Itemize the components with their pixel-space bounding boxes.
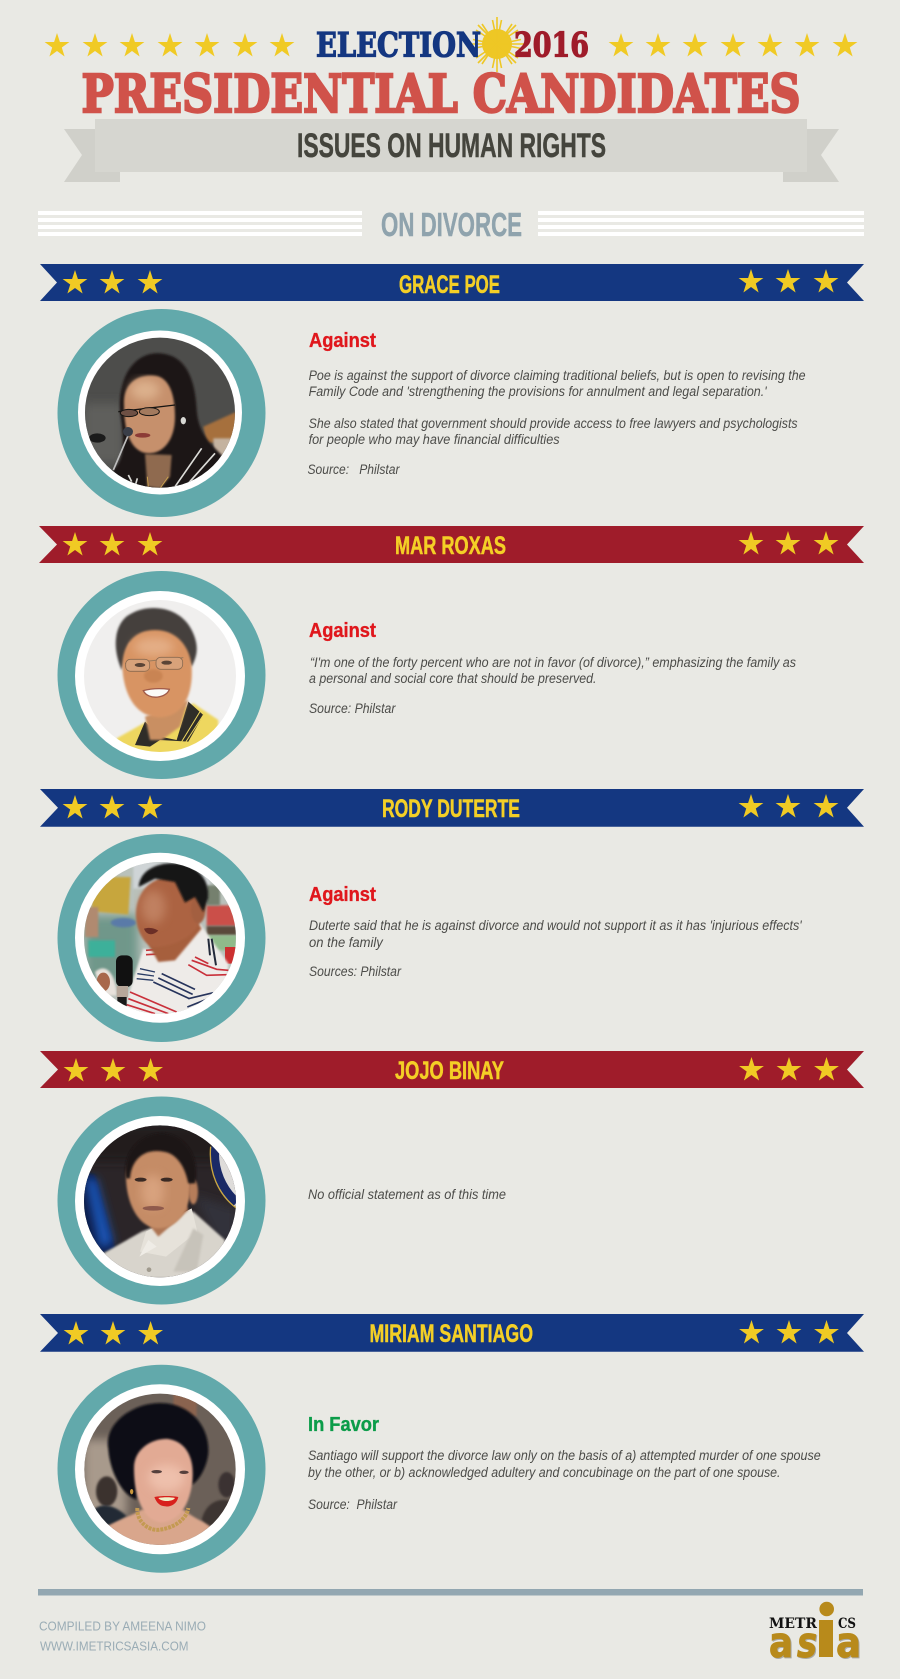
- banner: jojo binay: [40, 1051, 864, 1088]
- section heading: on divorce: ON DIVORCE: [381, 206, 522, 243]
- stance: rody duterte: Against: [309, 884, 376, 906]
- logo: metrics asia: METR: [769, 1616, 818, 1632]
- text block: grace poe: Family Code and 'strengthening the provisions for annulment and legal separation.': [309, 384, 767, 399]
- title: 2016: 2016: [514, 26, 589, 66]
- banner: rody duterte: [40, 789, 864, 827]
- logo: metrics asia: CS: [838, 1616, 856, 1632]
- stance: miriam santiago: In Favor: [308, 1414, 379, 1436]
- footer credit: COMPILED BY AMEENA NIMO: [39, 1620, 206, 1634]
- subtitle text: ISSUES ON HUMAN RIGHTS: [297, 127, 606, 165]
- banner: mar roxas: MAR ROXAS: [395, 532, 506, 560]
- banner: miriam santiago: MIRIAM SANTIAGO: [370, 1320, 533, 1348]
- logo: metrics asia: a: [836, 1618, 861, 1667]
- stance: mar roxas: Against: [309, 620, 376, 642]
- text block: grace poe: Poe is against the support of divorce claiming traditional beliefs, but is open to revising the: [309, 368, 806, 383]
- text block: rody duterte: on the family: [309, 935, 384, 950]
- banner: rody duterte: RODY DUTERTE: [382, 795, 520, 823]
- text block: grace poe: for people who may have financial difficulties: [309, 432, 560, 447]
- logo: metrics asia: a: [770, 1619, 794, 1668]
- logo: metrics asia: [769, 1602, 862, 1668]
- portrait: jojo binay: [58, 1096, 266, 1304]
- text block: miriam santiago: Source: Philstar: [308, 1497, 397, 1512]
- banner: grace poe: [40, 264, 864, 301]
- text block: grace poe: She also stated that government should provide access to free lawyers and psychologists: [309, 416, 798, 431]
- logo: metrics asia: a: [769, 1618, 793, 1667]
- footer url: WWW.IMETRICSASIA.COM: [40, 1640, 188, 1654]
- text block: miriam santiago: by the other, or b) acknowledged adultery and concubinage on the part of one spouse.: [308, 1465, 780, 1480]
- text block: rody duterte: Sources: Philstar: [309, 964, 401, 979]
- banner: grace poe: GRACE POE: [399, 271, 500, 299]
- portrait: rody duterte: [58, 834, 266, 1042]
- text block: mar roxas: a personal and social core that should be preserved.: [309, 671, 596, 686]
- footer rule: [38, 1589, 863, 1596]
- text block: mar roxas: “I'm one of the forty percent who are not in favor (of divorce),” emphasizing the family as: [310, 655, 796, 670]
- subtitle ribbon: [64, 119, 839, 182]
- text block: grace poe: [308, 368, 806, 477]
- portrait: mar roxas: [58, 571, 266, 779]
- header stars: left: [45, 33, 294, 56]
- text block: jojo binay: No official statement as of this time: [308, 1187, 506, 1202]
- section heading: on divorce: [38, 206, 864, 243]
- portrait: grace poe: [58, 309, 266, 517]
- text block: mar roxas: [309, 655, 796, 716]
- text block: grace poe: Source: Philstar: [308, 462, 400, 477]
- stance: grace poe: Against: [309, 330, 376, 352]
- text block: miriam santiago: [308, 1448, 821, 1512]
- text block: mar roxas: Source: Philstar: [309, 701, 396, 716]
- icon: philippine sun: [470, 17, 524, 72]
- banner: jojo binay: JOJO BINAY: [395, 1057, 504, 1085]
- logo: metrics asia: a: [837, 1619, 862, 1668]
- header stars: right: [609, 33, 857, 56]
- banner: mar roxas: [39, 526, 864, 563]
- text block: rody duterte: Duterte said that he is against divorce and would not support it as it has 'injurious effects': [309, 918, 802, 933]
- title: election: ELECTION: [316, 26, 481, 66]
- text block: rody duterte: [309, 918, 802, 979]
- text block: miriam santiago: Santiago will support the divorce law only on the basis of a) attempted murder of one spouse: [308, 1448, 821, 1463]
- banner: miriam santiago: [40, 1314, 864, 1352]
- portrait: miriam santiago: [58, 1365, 266, 1573]
- logo: metrics asia: s: [797, 1618, 817, 1667]
- logo: metrics asia: s: [798, 1619, 818, 1668]
